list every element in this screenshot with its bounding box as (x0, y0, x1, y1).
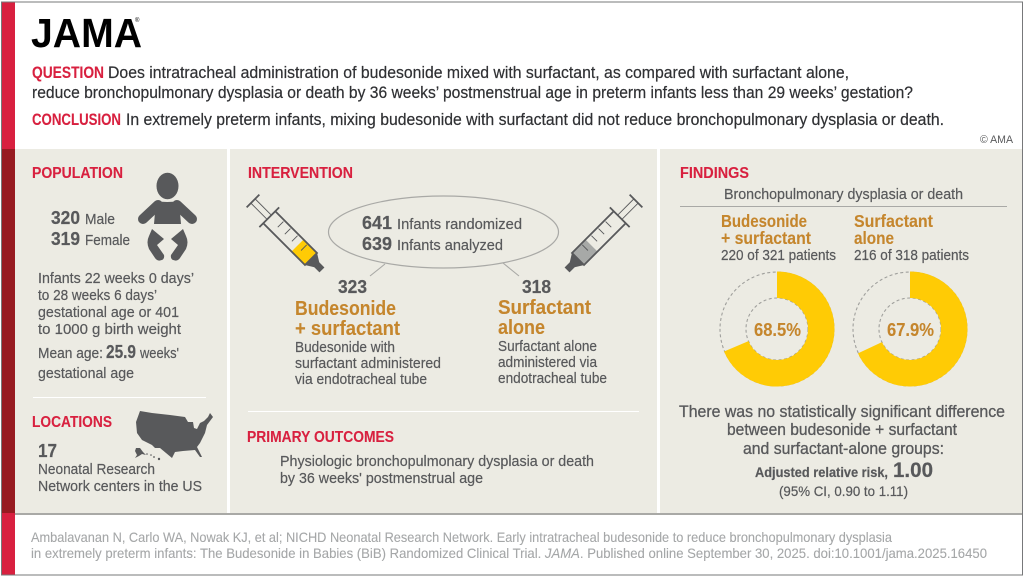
primary outcomes: Physiologic bronchopulmonary dysplasia or death (280, 453, 594, 470)
arm: surfactant: endotracheal tube (498, 370, 607, 387)
arm: budesonide: Budesonide (295, 298, 396, 320)
finding statement (679, 403, 1005, 458)
donut chart: 67.9% (853, 272, 967, 386)
ellipse: randomized (328, 196, 558, 268)
icon: budesonide syringe (243, 191, 331, 279)
icon: US map (135, 411, 213, 460)
ellipse: randomized: Infants analyzed (397, 237, 503, 254)
findings heading: FINDINGS (680, 165, 749, 182)
eligibility text: Infants 22 weeks 0 days’ (38, 270, 194, 287)
sex counts: 319 (51, 228, 80, 249)
conclusion: CONCLUSION (32, 111, 121, 129)
arm: budesonide: + surfactant (295, 318, 400, 340)
arm: budesonide: via endotracheal tube (295, 371, 427, 388)
group label: budesonide (721, 211, 836, 264)
arm: surfactant (498, 276, 607, 387)
location count: 17 (38, 440, 57, 461)
ellipse: randomized: 639 (362, 233, 392, 254)
arm: surfactant: Surfactant (498, 297, 591, 319)
eligibility text: gestational age or 401 (38, 304, 179, 321)
mean age: 25.9 (106, 342, 136, 362)
group label: budesonide: Budesonide (721, 211, 807, 231)
group label: budesonide: 220 of 321 patients (721, 248, 836, 264)
finding statement: and surfactant-alone groups: (743, 440, 944, 458)
mean age (38, 342, 179, 382)
adjusted relative risk: (95% CI, 0.90 to 1.11) (779, 483, 908, 499)
finding statement: between budesonide + surfactant (727, 421, 957, 439)
group label: surfactant: 216 of 318 patients (854, 248, 969, 264)
question: reduce bronchopulmonary dysplasia or death by 36 weeks’ postmenstrual age in preterm infants less than 29 weeks’ gestation? (32, 84, 913, 102)
connector lines (370, 263, 519, 276)
group label: surfactant: alone (854, 228, 894, 248)
population heading: POPULATION (32, 165, 123, 182)
icon: baby (143, 173, 192, 261)
group label: surfactant: Surfactant (854, 211, 933, 231)
intervention content (243, 165, 646, 487)
locations heading: LOCATIONS (32, 414, 112, 431)
arm: surfactant: Surfactant alone (498, 338, 597, 355)
arm: budesonide: surfactant administered (295, 355, 441, 372)
primary outcomes: PRIMARY OUTCOMES (247, 429, 394, 446)
question: Does intratracheal administration of budesonide mixed with surfactant, as compared with surfactant alone, (108, 64, 849, 82)
ellipse: randomized: Infants randomized (397, 216, 522, 233)
sex counts: Female (85, 232, 130, 249)
finding statement: There was no statistically significant difference (679, 403, 1005, 421)
arm: surfactant: administered via (498, 354, 598, 371)
findings content (679, 165, 1007, 499)
intervention heading: INTERVENTION (248, 165, 353, 182)
primary outcomes (247, 429, 594, 487)
question: QUESTION (32, 64, 104, 82)
JAMA logo: JAMA (31, 10, 142, 56)
eligibility text: to 28 weeks 6 days’ (38, 287, 157, 304)
findings subheading: Bronchopulmonary dysplasia or death (724, 186, 963, 203)
sex counts (51, 207, 130, 249)
group label: surfactant (854, 211, 969, 264)
sex counts: 320 (51, 207, 80, 228)
donut chart: 68.5% (720, 272, 834, 386)
ellipse: randomized: 641 (362, 212, 392, 233)
mean age: Mean age: (38, 345, 103, 362)
copyright: © AMA (980, 134, 1014, 146)
arm: budesonide: 323 (338, 276, 367, 297)
arm: surfactant: 318 (522, 276, 551, 297)
primary outcomes: by 36 weeks' postmenstrual age (280, 470, 483, 487)
arm: budesonide: Budesonide with (295, 339, 395, 356)
eligibility text: to 1000 g birth weight (38, 321, 182, 338)
adjusted relative risk (755, 459, 933, 499)
mean age: gestational age (38, 365, 134, 382)
left accent bar (2, 2, 15, 575)
citation: in extremely preterm infants: The Budesonide in Babies (BiB) Randomized Clinical Trial. JAMA. Published online September 30, 2025. doi:10.1001/jama.2025.16450 (31, 545, 987, 561)
donut chart: 68.5%: 68.5% (754, 319, 801, 340)
adjusted relative risk: Adjusted relative risk, (755, 464, 888, 480)
panel: findings (660, 149, 1022, 513)
mean age: weeks' (139, 345, 179, 362)
conclusion: In extremely preterm infants, mixing budesonide with surfactant did not reduce bronchopulmonary dysplasia or death. (126, 111, 944, 129)
arm: budesonide (295, 276, 441, 388)
citation (31, 529, 987, 561)
location count: Neonatal Research (38, 461, 155, 478)
icon: surfactant syringe (558, 191, 646, 279)
citation: Ambalavanan N, Carlo WA, Nowak KJ, et al; NICHD Neonatal Research Network. Early intratracheal budesonide to reduce bronchopulmonary dysplasia (31, 529, 892, 545)
panel: population (15, 149, 227, 513)
eligibility text (38, 270, 194, 338)
panel: intervention (230, 149, 657, 513)
question (32, 64, 913, 102)
sex counts: Male (85, 211, 115, 228)
arm: surfactant: alone (498, 317, 545, 339)
population content (32, 165, 213, 495)
location count (38, 440, 202, 495)
donut chart: 67.9%: 67.9% (887, 319, 934, 340)
JAMA logo: ® (135, 17, 140, 24)
group label: budesonide: + surfactant (721, 228, 811, 248)
adjusted relative risk: 1.00 (893, 459, 933, 482)
location count: Network centers in the US (38, 478, 202, 495)
